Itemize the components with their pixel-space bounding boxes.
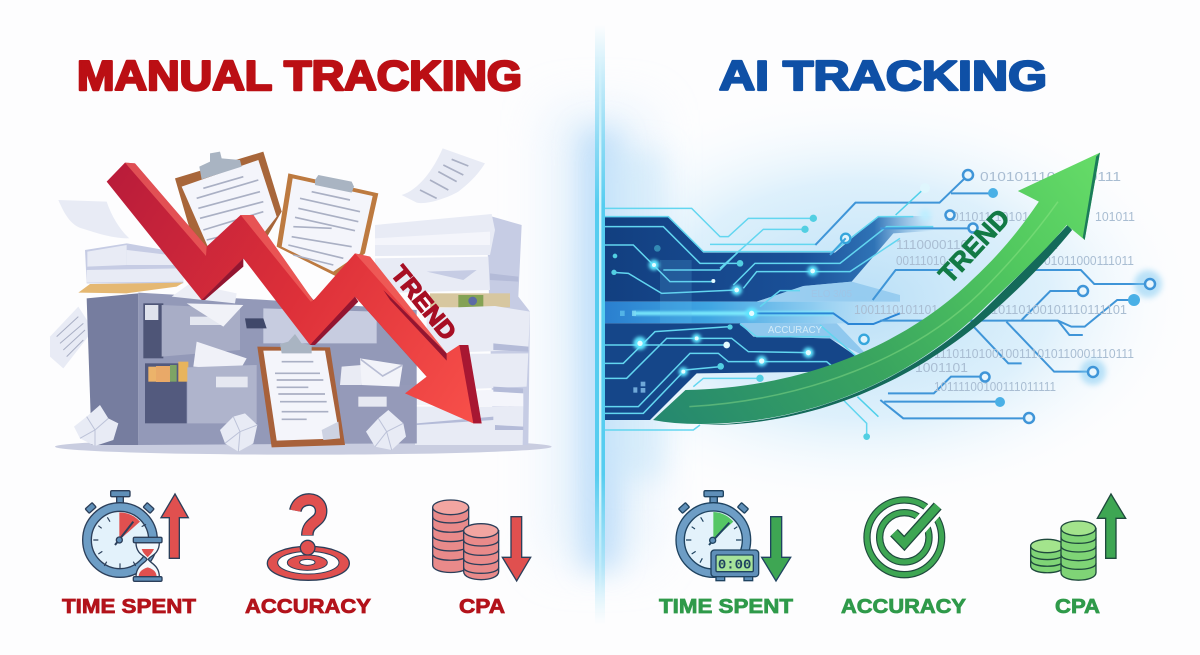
- binary digits and circuit labels: ACCURACY: [768, 325, 822, 336]
- central divider line: [595, 25, 605, 625]
- falling trend arrow: [107, 163, 482, 423]
- circuit band upper: [605, 216, 937, 302]
- circuit band channel: [757, 282, 900, 302]
- crumpled paper balls: [74, 405, 406, 452]
- arrow label: TREND: [385, 261, 461, 346]
- binary digits and circuit labels: 11: [1040, 237, 1058, 252]
- binary digits and circuit labels: 1110000110: [896, 237, 968, 252]
- metrics row: AI: [659, 491, 1126, 618]
- icon: stopwatch with digital timer and down arrow: [676, 491, 791, 581]
- rising trend arrow: [653, 153, 1100, 425]
- binary digits and circuit labels: 10111100100111011111: [934, 379, 1056, 394]
- circuit band lower: [605, 323, 867, 420]
- binary digits and circuit labels: 1001101: [915, 360, 968, 375]
- paper stack right: [375, 214, 530, 445]
- label: CPA: CPA: [1055, 595, 1100, 618]
- glowing circuit dots: [611, 215, 870, 440]
- binary digits and circuit labels: 1011011 10101: [945, 209, 1029, 224]
- circuit band glow: [605, 302, 900, 323]
- binary digits and circuit labels: 00111010: [896, 253, 946, 268]
- label: CPA: CPA: [459, 595, 505, 618]
- binary digits and circuit labels: ELO 3/05: [811, 289, 852, 300]
- icon: stopwatch with hourglass and up arrow: [83, 491, 188, 581]
- label: time spent: TIME SPENT: [659, 595, 794, 618]
- title: manual tracking: MANUAL TRACKING: [77, 52, 522, 99]
- icon: coins with down arrow: [433, 500, 531, 581]
- binary digits and circuit labels: 101011: [1095, 209, 1135, 224]
- icon: stopwatch with digital timer and down arrow: 0:00: [718, 558, 751, 574]
- binary digits and circuit labels: 10110100101110111101: [991, 302, 1127, 317]
- circuit board: [605, 208, 937, 440]
- circuit traces right: [815, 175, 1150, 418]
- icon: coins with up arrow: [1031, 494, 1126, 580]
- paper stack left: [78, 243, 183, 293]
- binary digits and circuit labels: 1001110101101: [854, 302, 938, 317]
- clipboard: back right: [277, 173, 378, 277]
- metrics row: manual: [62, 491, 531, 618]
- binary digits and circuit labels: [768, 169, 1135, 394]
- binary digits and circuit labels: 01011000111011: [1044, 253, 1134, 268]
- illustration: manual paperwork pile with falling trend arrow: [50, 148, 552, 455]
- arrow label: TREND: [932, 203, 1016, 289]
- circuit band accuracy channel: [740, 323, 872, 360]
- flying paper top right: [402, 148, 485, 203]
- background: AI side blue haze: [515, 85, 1200, 515]
- circuit main beam: [620, 260, 900, 393]
- flying paper top left: [58, 200, 129, 238]
- circuit nodes right: [919, 170, 1162, 423]
- icon: check mark in target: [867, 500, 942, 575]
- label: accuracy: ACCURACY: [245, 595, 371, 618]
- floor shadow: [55, 439, 552, 455]
- binary digits and circuit labels: 1110110100100111010110001110111: [934, 346, 1134, 361]
- title: AI tracking: AI TRACKING: [719, 52, 1047, 99]
- flying paper left: [50, 307, 93, 368]
- circuit traces: [605, 208, 933, 437]
- binary digits and circuit labels: 01010111011010111: [980, 169, 1121, 184]
- background: central glow: [550, 110, 665, 570]
- clipboard: front: [257, 334, 345, 447]
- filing cabinet: [87, 283, 417, 445]
- icon: question mark over target: [267, 500, 349, 580]
- clipboard: back left: [175, 152, 282, 253]
- label: time spent: TIME SPENT: [62, 595, 197, 618]
- illustration: AI circuit board with rising trend arrow: [605, 153, 1162, 440]
- label: accuracy: ACCURACY: [841, 595, 966, 618]
